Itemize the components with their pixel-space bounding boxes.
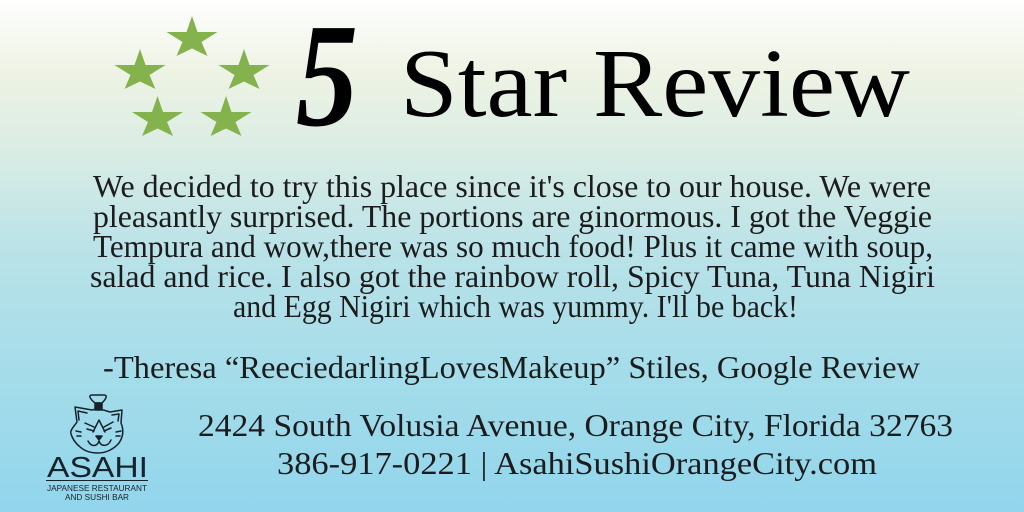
title: Star Review: [400, 30, 910, 138]
logo: Asahi: AND SUSHI BAR: [65, 493, 129, 502]
address: 2424 South Volusia Avenue, Orange City, Florida 32763: [198, 407, 953, 443]
logo tagline: JAPANESE RESTAURANT: [47, 484, 147, 493]
logo: Asahi: [46, 395, 148, 502]
review text: pleasantly surprised. The portions are ginormous. I got the Veggie: [93, 198, 932, 234]
icon: five green stars: [114, 16, 270, 136]
review text: salad and rice. I also got the rainbow roll, Spicy Tuna, Tuna Nigiri: [90, 258, 935, 294]
review text: [90, 168, 935, 324]
review text: and Egg Nigiri which was yummy. I'll be back!: [233, 288, 798, 324]
review text: Tempura and wow,there was so much food! Plus it came with soup,: [93, 228, 933, 264]
title: [296, 0, 910, 158]
icon: cat face: [71, 395, 123, 453]
attribution: -Theresa “ReeciedarlingLovesMakeup” Stiles, Google Review: [103, 349, 920, 385]
phone and website: 386-917-0221 | AsahiSushiOrangeCity.com: [277, 445, 877, 481]
review text: We decided to try this place since it's close to our house. We were: [93, 168, 931, 204]
logo wordmark: ASAHI: [47, 452, 148, 484]
